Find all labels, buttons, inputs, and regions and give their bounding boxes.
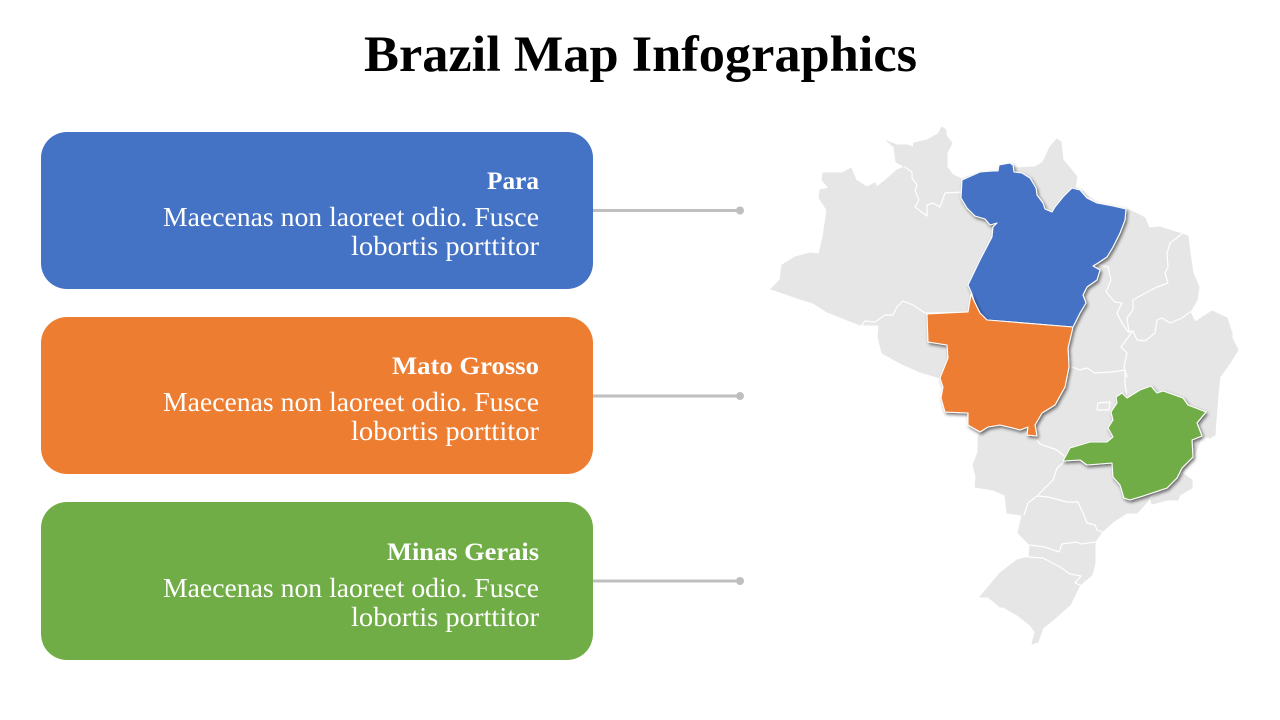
map of Brazil bbox=[771, 127, 1238, 644]
heading: Mato Grosso: Mato Grosso bbox=[392, 353, 539, 380]
map: Mato Grosso state bbox=[927, 294, 1073, 436]
text block: Minas Gerais description: lobortis porttitor bbox=[351, 602, 539, 632]
connector: Mato Grosso bbox=[593, 392, 744, 400]
panel: Mato Grosso bbox=[41, 317, 593, 474]
text block: Para description: lobortis porttitor bbox=[351, 231, 539, 261]
map: Minas Gerais state bbox=[1063, 386, 1206, 500]
heading: Para: Para bbox=[487, 168, 539, 195]
connector: Minas Gerais bbox=[593, 577, 744, 585]
panel: Minas Gerais bbox=[41, 502, 593, 660]
panel: Para bbox=[41, 132, 593, 289]
map: state borders bbox=[861, 167, 1190, 585]
title: Brazil Map Infographics bbox=[364, 27, 917, 83]
text block: Para description: Maecenas non laoreet odio. Fusce bbox=[163, 202, 539, 232]
map: Para state bbox=[961, 163, 1126, 327]
text block: Mato Grosso description: Maecenas non laoreet odio. Fusce bbox=[163, 387, 539, 417]
text block: Mato Grosso description bbox=[163, 387, 539, 446]
text block: Para description bbox=[163, 202, 539, 261]
connector: Para bbox=[593, 206, 744, 214]
map: base silhouette bbox=[771, 127, 1238, 644]
text block: Minas Gerais description bbox=[163, 573, 539, 632]
heading: Minas Gerais: Minas Gerais bbox=[387, 539, 539, 566]
text block: Minas Gerais description: Maecenas non laoreet odio. Fusce bbox=[163, 573, 539, 603]
text block: Mato Grosso description: lobortis porttitor bbox=[351, 416, 539, 446]
